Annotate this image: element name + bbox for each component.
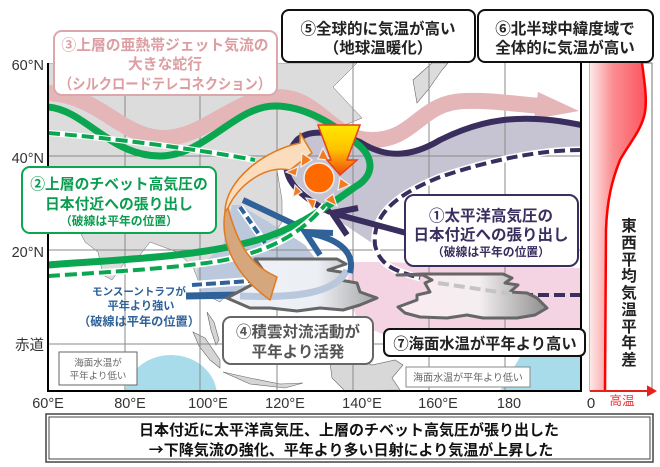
callout 5: global warming: ⑤全球的に気温が高い: [300, 19, 456, 38]
axis labels: 60°E: [32, 396, 64, 412]
label: monsoon trough: （破線は平年の位置）: [78, 314, 200, 328]
arrow: Pacific high expansion: [332, 208, 410, 235]
callout 4: convection: [223, 317, 373, 364]
cloud: central Pacific: [397, 274, 547, 318]
label: monsoon trough: [78, 285, 200, 328]
callout 7: warm SST: ⑦海面水温が平年より高い: [393, 335, 577, 353]
monsoon shading: [197, 205, 314, 292]
callout 4: convection: 平年より活発: [252, 342, 345, 361]
callout 6: mid-latitude warm: ⑥北半球中緯度域で: [495, 19, 635, 38]
land: Eurasia: [48, 63, 362, 302]
callout 1: Pacific high: 日本付近への張り出し: [413, 226, 569, 244]
cold sea area west: [126, 355, 216, 390]
vertical label: 年: [621, 333, 637, 352]
summary box: [46, 414, 653, 462]
Pacific high shading: [286, 119, 581, 245]
axis labels: 180: [497, 396, 521, 412]
green dashed line: normal position: [48, 133, 325, 276]
callout 2: Tibetan high: （破線は平年の位置）: [60, 214, 178, 228]
axis labels: 160°E: [418, 396, 458, 412]
vertical label: 西: [621, 235, 637, 252]
orange arrow: upper-level wave propagation: [224, 133, 312, 300]
land: Java: [223, 372, 303, 388]
callout 2: Tibetan high: ②上層のチベット高気圧の: [30, 175, 208, 193]
callout 2: Tibetan high: [22, 167, 216, 233]
callout 2: Tibetan high: 日本付近への張り出し: [45, 196, 193, 213]
callout 1: Pacific high: ①太平洋高気圧の: [429, 206, 553, 225]
callout 4: convection: ④積雲対流活動が: [236, 322, 360, 341]
vertical label: 平: [621, 319, 637, 336]
axis labels: 40°N: [12, 151, 44, 167]
vertical label: 温: [621, 301, 637, 319]
cold sea area east: [500, 356, 580, 390]
axis labels: 赤道: [15, 337, 44, 354]
axis labels: 120°E: [265, 396, 305, 412]
label: monsoon trough: モンスーントラフが: [92, 285, 186, 298]
warm sea area: [345, 262, 581, 335]
icon: sun: [286, 148, 350, 210]
land: Kamchatka: [413, 63, 448, 103]
callout 3: subtropical jet: 大きな蛇行: [128, 55, 202, 73]
cloud: Philippine Sea: [227, 259, 377, 311]
Pacific high current position: [286, 119, 581, 212]
vertical label: 平: [621, 252, 637, 269]
axis labels: [12, 58, 521, 412]
label: cold SST west: 海面水温が: [74, 357, 122, 369]
yellow arrow: subsidence: [318, 125, 360, 175]
vertical label: 気: [621, 283, 637, 302]
label: cold SST west: 平年より低い: [70, 370, 126, 382]
monsoon trough lines: [186, 200, 300, 296]
callout 5: global warming: （地球温暖化）: [324, 39, 432, 57]
callout 3: subtropical jet: [54, 31, 277, 95]
axis arrow: [590, 387, 655, 395]
vertical label: 差: [621, 350, 637, 369]
vertical label: 東: [621, 216, 637, 235]
temperature anomaly curve: [590, 63, 646, 390]
callout 6: mid-latitude warm: [478, 10, 653, 62]
map panel: [47, 63, 582, 392]
label: cold SST east: [406, 367, 530, 387]
label: cold SST west: [59, 352, 137, 385]
callout 3: subtropical jet: （シルクロードテレコネクション）: [59, 76, 271, 93]
callout 1: Pacific high: [405, 195, 578, 266]
axis label high temperature: 高温: [609, 393, 635, 408]
jet stream arrow: [48, 92, 579, 140]
label: cold SST east: 海面水温が平年より低い: [413, 371, 523, 384]
land: New Guinea: [330, 360, 404, 390]
callout 1: Pacific high: （破線は平年の位置）: [432, 245, 550, 259]
axis labels: 80°E: [114, 396, 146, 412]
dashed line through cloud: [438, 283, 512, 294]
land: Sumatra and Malaya: [193, 312, 220, 368]
callout 5: global warming: [282, 10, 475, 62]
Pacific high normal position: [375, 150, 581, 295]
summary box: →下降気流の強化、平年より多い日射により気温が上昇した: [149, 439, 553, 460]
axis labels: 140°E: [342, 396, 382, 412]
axis labels: 60°N: [12, 58, 44, 74]
grid: [48, 63, 586, 391]
callout 6: mid-latitude warm: 全体的に気温が高い: [495, 38, 635, 57]
summary box: 日本付近に太平洋高気圧、上層のチベット高気圧が張り出した: [139, 421, 559, 439]
axis labels: 100°E: [188, 396, 228, 412]
plot frame: [48, 63, 581, 391]
label: monsoon trough: 平年より強い: [108, 298, 174, 312]
panel: zonal mean temperature anomaly: [587, 63, 655, 412]
axis labels: 20°N: [12, 245, 44, 261]
green solid line: Tibetan high: [48, 106, 370, 265]
axis label zero: 0: [587, 395, 595, 412]
vertical label: 均: [621, 267, 637, 285]
callout 3: subtropical jet: ③上層の亜熱帯ジェット気流の: [61, 36, 269, 54]
arrow: convection outflow: [240, 232, 351, 297]
callout 7: warm SST: [384, 329, 585, 356]
